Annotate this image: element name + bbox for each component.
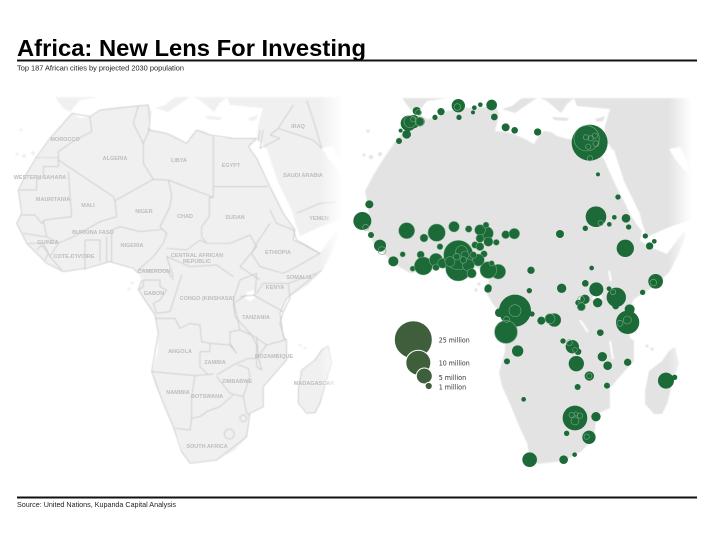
map: country labels: MAURITANIA xyxy=(36,197,70,203)
map: country labels: CENTRAL AFRICAN xyxy=(171,253,223,259)
map: country labels xyxy=(14,124,334,450)
legend labels xyxy=(439,336,470,392)
map: country labels: EGYPT xyxy=(222,163,241,169)
source note: Source: United Nations, Kupanda Capital Analysis xyxy=(17,500,176,509)
map: country labels: SOUTH AFRICA xyxy=(186,444,228,450)
bubbles: north Africa and Horn xyxy=(353,99,657,274)
map: country labels: CAMEROON xyxy=(138,269,170,275)
legend labels: 1 million xyxy=(439,384,466,392)
bubbles: Nigeria and Gulf of Guinea cluster xyxy=(399,221,520,291)
legend labels: 10 million xyxy=(439,360,470,368)
map: country labels: ZIMBABWE xyxy=(222,379,252,385)
map: country labels: TANZANIA xyxy=(242,315,270,321)
map: country labels: IRAQ xyxy=(291,124,306,130)
legend circles xyxy=(394,321,432,390)
legend labels: 25 million xyxy=(439,336,470,344)
map: country labels: WESTERN SAHARA xyxy=(14,175,66,181)
map: country labels: SAUDI ARABIA xyxy=(283,173,323,179)
map: country labels: YEMEN xyxy=(309,216,329,222)
map: country labels: REPUBLIC xyxy=(183,259,211,265)
subtitle: Top 187 African cities by projected 2030 population xyxy=(17,64,184,72)
bubbles: central, east and southern Africa xyxy=(484,274,677,467)
map: country labels: NAMIBIA xyxy=(166,390,190,396)
bubbles: rings marking overlapping north cities xyxy=(363,104,603,255)
chart: city population bubbles xyxy=(353,99,677,467)
map: country borders south xyxy=(138,270,332,463)
legend: bubble size scale xyxy=(394,321,470,392)
map: country labels: ANGOLA xyxy=(168,349,192,355)
map: country labels: NIGER xyxy=(135,209,153,215)
map: country labels: MALI xyxy=(81,203,95,209)
title: Africa: New Lens For Investing xyxy=(17,35,366,61)
map: country labels: NIGERIA xyxy=(121,243,143,249)
panel: land base map for city bubbles xyxy=(348,88,712,464)
map: country labels: ALGERIA xyxy=(103,156,127,162)
map: country labels: CHAD xyxy=(177,214,193,220)
legend labels: 5 million xyxy=(439,374,466,382)
map: country labels: SUDAN xyxy=(225,215,245,221)
map: country labels: ETHIOPIA xyxy=(265,250,291,256)
map: country labels: MOZAMBIQUE xyxy=(255,354,293,360)
panel: political reference map of Africa xyxy=(0,88,364,488)
map: country labels: BURKINA FASO xyxy=(72,230,115,236)
map: country labels: GUINEA xyxy=(37,240,59,246)
map: country labels: CONGO (KINSHASA) xyxy=(180,296,235,302)
map: country labels: COTE-D'IVOIRE xyxy=(53,254,95,260)
map: country labels: LIBYA xyxy=(171,158,187,164)
map: country labels: GABON xyxy=(144,291,164,297)
map: country labels: SOMALIA xyxy=(286,275,312,281)
map: country borders north xyxy=(17,100,340,280)
map: country labels: ZAMBIA xyxy=(204,360,226,366)
map: country labels: MOROCCO xyxy=(50,137,80,143)
bubbles: rings marking overlapping south cities xyxy=(495,279,657,439)
map: country labels: BOTSWANA xyxy=(191,394,223,400)
map: country labels: KENYA xyxy=(266,285,284,291)
map: country labels: MADAGASCAR xyxy=(294,381,334,387)
